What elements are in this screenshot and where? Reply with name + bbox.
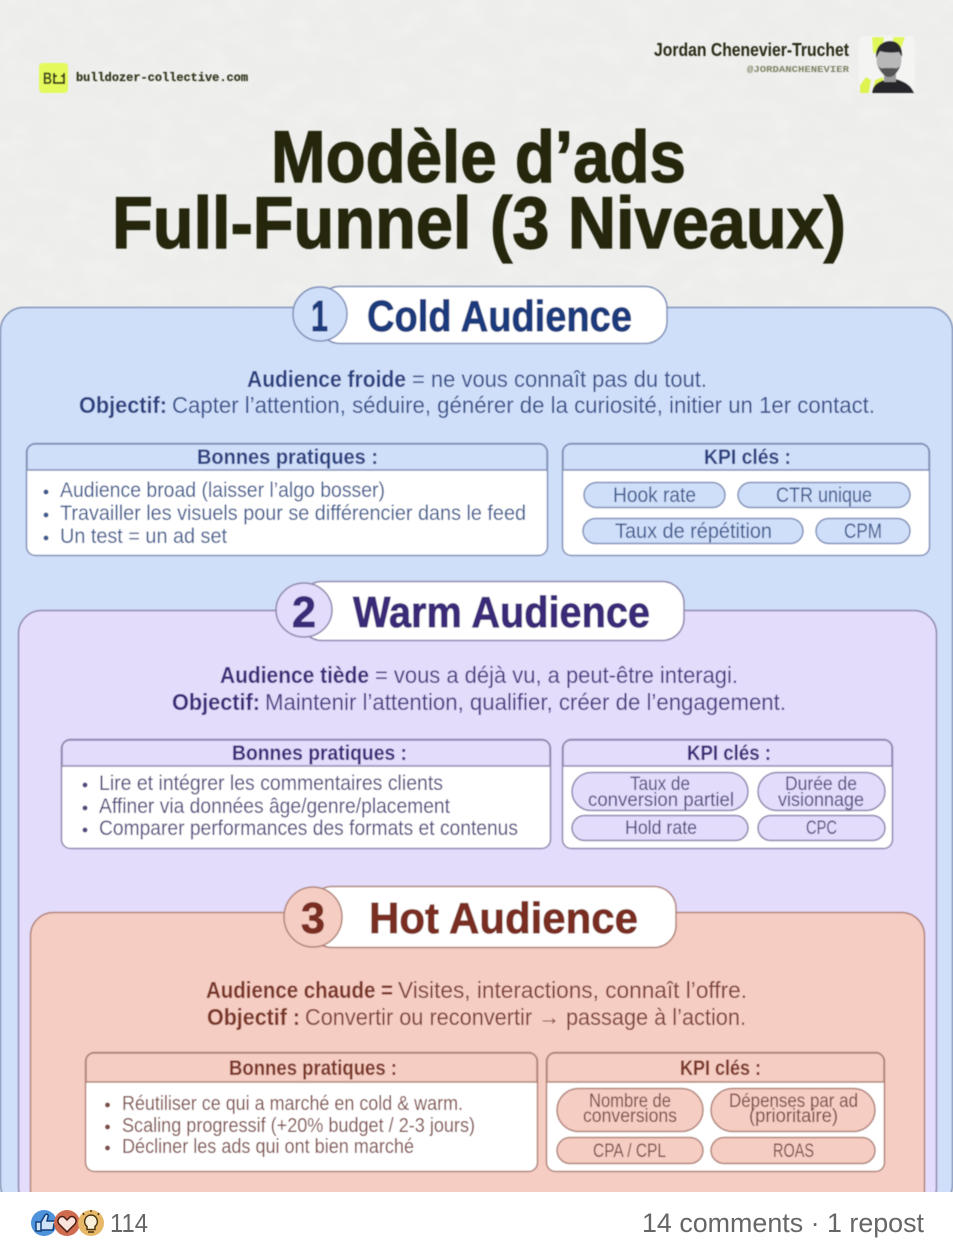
card: bonnes pratiques cold: Bonnes pratiques : xyxy=(197,445,378,469)
card: KPI warm xyxy=(562,740,892,848)
card: KPI hot: CPA / CPL xyxy=(593,1141,666,1162)
text block: cold audience definition: Objectif: xyxy=(79,392,167,418)
card: KPI cold xyxy=(562,444,930,556)
card: KPI warm: Durée de xyxy=(785,773,857,795)
card: bonnes pratiques hot: Réutiliser ce qui a marché en cold & warm. xyxy=(122,1093,463,1115)
card: bonnes pratiques hot: Décliner les ads qui ont bien marché xyxy=(122,1136,414,1158)
card: KPI cold: Taux de répétition xyxy=(615,520,772,543)
icon: lightbulb reaction xyxy=(78,1210,104,1236)
heading: 2 Warm Audience: Warm Audience xyxy=(353,588,650,637)
heading: 2 Warm Audience: 2 xyxy=(292,588,316,637)
card: KPI hot: Dépenses par ad xyxy=(729,1091,858,1112)
text block: cold audience definition: Capter l’attention, séduire, générer de la curiosité, initier un 1er contact. xyxy=(172,392,875,418)
card: bonnes pratiques cold xyxy=(26,444,548,556)
card: bonnes pratiques warm: Comparer performances des formats et contenus xyxy=(99,817,518,840)
card: bonnes pratiques warm: Lire et intégrer les commentaires clients xyxy=(99,772,443,795)
text block: hot audience definition: Convertir ou reconvertir → passage à l’action. xyxy=(305,1004,746,1030)
icon: like reaction xyxy=(31,1210,57,1236)
text block: warm audience definition: Objectif: xyxy=(172,689,260,715)
heading: 2 Warm Audience xyxy=(276,582,684,640)
card: KPI cold: Hook rate xyxy=(613,484,696,507)
author block: Jordan Chenevier-Truchet xyxy=(654,40,849,60)
card: bonnes pratiques warm: Affiner via données âge/genre/placement xyxy=(99,795,450,818)
card: bonnes pratiques hot: Bonnes pratiques : xyxy=(229,1057,397,1080)
text block: warm audience definition xyxy=(172,662,786,715)
comments and reposts count: 14 comments · 1 repost xyxy=(642,1208,924,1238)
text block: cold audience definition xyxy=(79,366,875,418)
footer bar xyxy=(0,1192,953,1250)
card: KPI warm: Hold rate xyxy=(625,817,697,839)
heading: 3 Hot Audience: Hot Audience xyxy=(369,894,638,943)
card: bonnes pratiques warm: Bonnes pratiques : xyxy=(232,742,407,765)
card: KPI hot: Nombre de xyxy=(589,1091,671,1112)
title xyxy=(112,117,846,264)
card: bonnes pratiques hot: Scaling progressif (+20% budget / 2-3 jours) xyxy=(122,1115,475,1137)
author block: @JORDANCHENEVIER xyxy=(747,65,850,75)
text block: cold audience definition: = ne vous connaît pas du tout. xyxy=(412,366,707,392)
text block: warm audience definition: Maintenir l’attention, qualifier, créer de l’engagement. xyxy=(265,689,786,715)
text block: warm audience definition: Audience tiède xyxy=(220,662,369,688)
card: KPI warm: conversion partiel xyxy=(588,789,734,811)
heading: 3 Hot Audience xyxy=(284,886,676,948)
card: KPI cold: KPI clés : xyxy=(704,445,791,469)
icon: heart reaction xyxy=(54,1210,80,1236)
text block: hot audience definition: Objectif : xyxy=(207,1004,300,1030)
text block: hot audience definition xyxy=(206,977,747,1030)
title: Modèle d’ads xyxy=(271,117,686,198)
card: KPI warm: KPI clés : xyxy=(687,742,771,765)
title: Full-Funnel (3 Niveaux) xyxy=(112,183,846,264)
card: bonnes pratiques warm xyxy=(62,740,550,848)
card: KPI hot: ROAS xyxy=(773,1141,814,1162)
icon: author portrait xyxy=(859,36,915,93)
panel: warm audience xyxy=(18,582,936,1210)
text block: hot audience definition: Visites, interactions, connaît l’offre. xyxy=(398,977,747,1003)
card: KPI warm: CPC xyxy=(806,817,837,839)
reaction count: 114 xyxy=(110,1208,148,1238)
card: bonnes pratiques hot xyxy=(86,1052,538,1172)
panel: hot audience xyxy=(30,886,924,1212)
card: KPI cold: CPM xyxy=(844,520,882,543)
text block: hot audience definition: Audience chaude = xyxy=(206,977,393,1003)
text block: cold audience definition: Audience froide xyxy=(247,366,406,392)
card: bonnes pratiques cold: Un test = un ad set xyxy=(60,524,227,548)
card: KPI hot: conversions xyxy=(583,1106,677,1127)
website address: bulldozer-collective.com xyxy=(76,71,248,85)
heading: 1 Cold Audience: Cold Audience xyxy=(367,292,632,341)
author block xyxy=(654,40,850,75)
logo: Bulldozer Collective: B xyxy=(43,69,52,88)
card: KPI hot xyxy=(546,1052,884,1172)
logo: Bulldozer Collective xyxy=(39,63,68,93)
heading: 3 Hot Audience: 3 xyxy=(301,894,325,943)
heading: 1 Cold Audience xyxy=(293,286,667,344)
card: KPI cold: CTR unique xyxy=(776,484,872,507)
card: bonnes pratiques cold: Travailler les visuels pour se différencier dans le feed xyxy=(60,501,526,525)
card: KPI warm: visionnage xyxy=(778,789,864,811)
heading: 1 Cold Audience: 1 xyxy=(311,292,328,341)
text block: warm audience definition: = vous a déjà vu, a peut-être interagi. xyxy=(375,662,738,688)
card: KPI hot: (prioritaire) xyxy=(749,1106,838,1127)
card: KPI hot: KPI clés : xyxy=(680,1057,761,1080)
card: KPI warm: Taux de xyxy=(630,773,690,795)
panel: cold audience xyxy=(0,286,952,1208)
card: bonnes pratiques cold: Audience broad (laisser l’algo bosser) xyxy=(60,478,385,502)
